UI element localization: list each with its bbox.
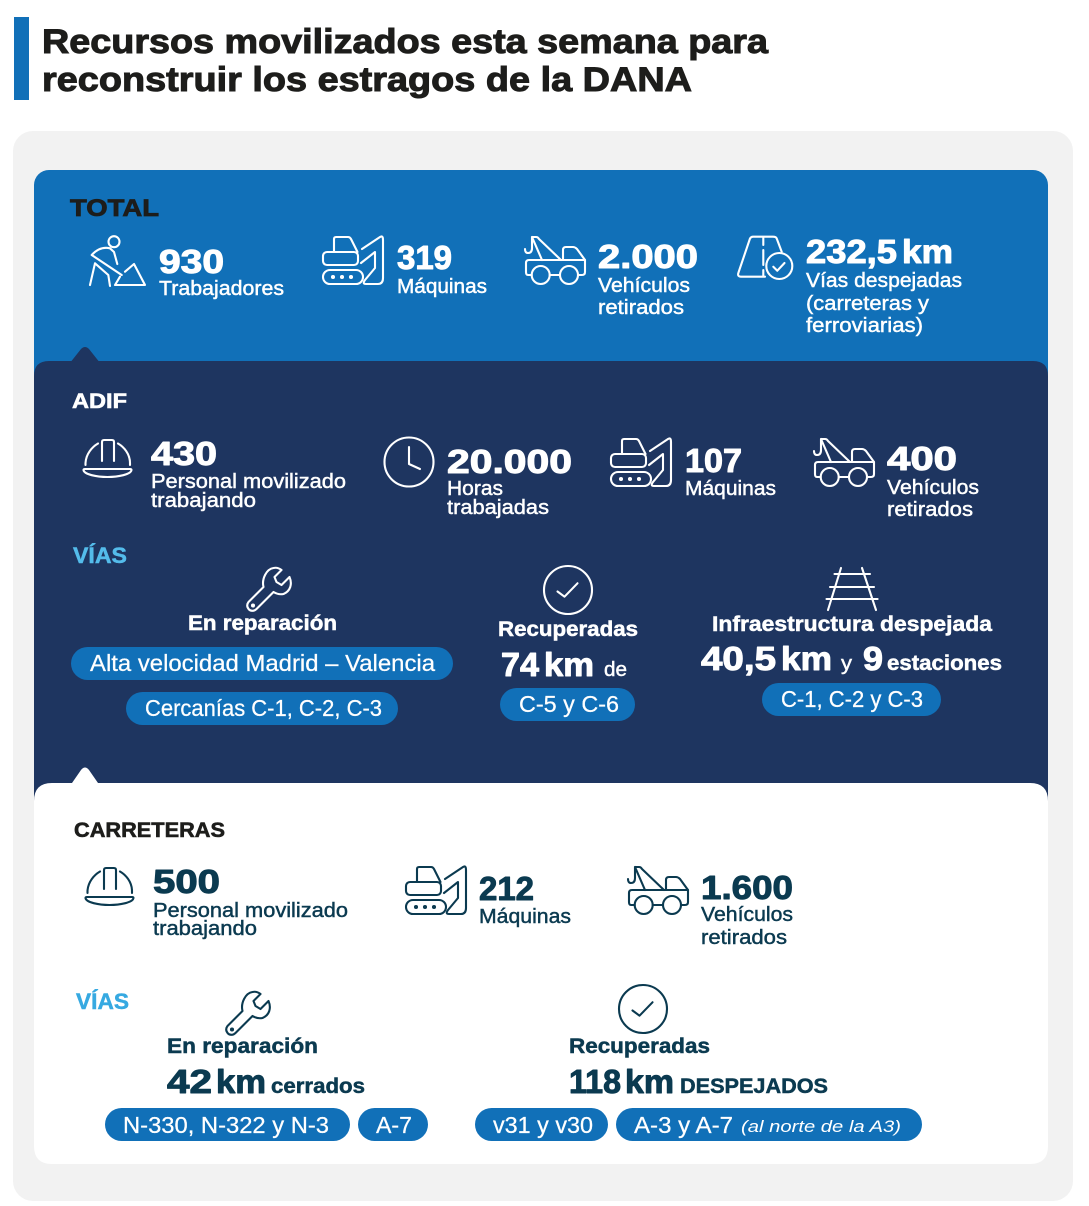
pill: alta velocidad bbox=[71, 647, 453, 680]
kilometres and stations bbox=[701, 640, 1002, 677]
kilometres and stations: km bbox=[781, 640, 832, 677]
kilometres: 74 bbox=[501, 646, 540, 683]
icon: tow truck bbox=[525, 237, 585, 284]
stat: máquinas bbox=[611, 438, 776, 500]
number: km bbox=[902, 233, 953, 270]
number bbox=[806, 233, 953, 270]
kilometres: cerrados bbox=[271, 1075, 365, 1098]
subheading: Recuperadas bbox=[569, 1035, 710, 1058]
subheading: En reparación bbox=[167, 1035, 318, 1058]
kilometres bbox=[167, 1063, 365, 1100]
panel: carreteras bbox=[34, 768, 1048, 1164]
subheading: En reparación bbox=[188, 612, 337, 635]
title bbox=[42, 23, 769, 99]
label: trabajando bbox=[151, 490, 256, 512]
stat: vías despejadas bbox=[738, 233, 962, 337]
pill: a-3 y a-7: (al norte de la A3) bbox=[741, 1118, 901, 1136]
title accent bar bbox=[14, 17, 29, 100]
icon: helmet bbox=[86, 868, 134, 905]
icon: excavator bbox=[323, 236, 383, 284]
kilometres: 118 bbox=[569, 1063, 621, 1100]
kilometres: 42 bbox=[167, 1063, 212, 1100]
heading: adif: ADIF bbox=[72, 390, 127, 413]
number: 930 bbox=[159, 243, 224, 280]
number: 430 bbox=[151, 435, 217, 472]
title: reconstruir los estragos de la DANA bbox=[42, 61, 692, 99]
pill: c-1, c-2 y c-3 bbox=[762, 683, 941, 716]
icon: wrench bbox=[226, 992, 270, 1035]
pill: a-3 y a-7: A-3 y A-7 bbox=[634, 1112, 733, 1138]
kilometres and stations: estaciones bbox=[887, 652, 1002, 675]
pill: a-3 y a-7 bbox=[616, 1108, 922, 1141]
icon: worker with shovel bbox=[90, 236, 145, 286]
number: 500 bbox=[153, 863, 220, 900]
block: recuperadas bbox=[475, 985, 922, 1141]
pill: v31 y v30: v31 y v30 bbox=[493, 1112, 593, 1138]
pill: n-330, n-322 y n-3 bbox=[105, 1108, 350, 1141]
kilometres bbox=[501, 646, 627, 683]
block: infraestructura despejada bbox=[701, 568, 1002, 716]
pill: n-330, n-322 y n-3: N-330, N-322 y N-3 bbox=[123, 1112, 329, 1138]
label bbox=[887, 477, 979, 521]
icon: excavator bbox=[406, 866, 466, 914]
label bbox=[806, 270, 962, 337]
pill: cercanías: Cercanías C-1, C-2, C-3 bbox=[145, 695, 382, 721]
label: Vehículos bbox=[887, 477, 979, 499]
heading: vías: VÍAS bbox=[76, 989, 129, 1014]
label: Máquinas bbox=[479, 906, 571, 928]
pill: a-7: A-7 bbox=[376, 1112, 412, 1138]
kilometres: de bbox=[604, 659, 627, 681]
stat: máquinas bbox=[323, 236, 487, 298]
number: 319 bbox=[397, 239, 452, 276]
label: retirados bbox=[887, 499, 973, 521]
stat: personal bbox=[84, 435, 346, 512]
title block bbox=[14, 17, 769, 100]
pill: c-5 y c-6 bbox=[500, 688, 635, 721]
label: Máquinas bbox=[685, 478, 776, 500]
icon: railway track bbox=[826, 568, 878, 610]
subheading: Infraestructura despejada bbox=[712, 613, 992, 636]
pill: c-5 y c-6: C-5 y C-6 bbox=[519, 691, 619, 717]
pill: c-1, c-2 y c-3: C-1, C-2 y C-3 bbox=[781, 686, 923, 712]
label bbox=[447, 478, 549, 519]
icon: tow truck bbox=[814, 439, 874, 486]
panel: total bbox=[34, 170, 1048, 390]
icon: tow truck bbox=[628, 867, 688, 914]
kilometres bbox=[569, 1063, 828, 1100]
block: recuperadas bbox=[498, 566, 638, 721]
number: 1.600 bbox=[701, 869, 793, 906]
label: trabajadas bbox=[447, 497, 549, 519]
label: Horas bbox=[447, 478, 503, 500]
heading: carreteras: CARRETERAS bbox=[74, 819, 225, 842]
stat: trabajadores bbox=[90, 236, 284, 300]
label: (carreteras y bbox=[806, 293, 929, 315]
label: Personal movilizado bbox=[151, 471, 346, 493]
number: 232,5 bbox=[806, 233, 897, 270]
icon: helmet bbox=[84, 440, 132, 477]
label: Vehículos bbox=[598, 275, 690, 297]
icon: wrench bbox=[247, 568, 291, 611]
icon: clock bbox=[384, 438, 434, 486]
label bbox=[153, 900, 348, 940]
number: 107 bbox=[685, 442, 742, 479]
pill: a-7 bbox=[358, 1108, 428, 1141]
icon: road with check bbox=[738, 237, 792, 279]
kilometres: km bbox=[625, 1063, 674, 1100]
label: Trabajadores bbox=[159, 278, 284, 300]
label bbox=[701, 904, 793, 949]
number: 20.000 bbox=[447, 443, 572, 480]
kilometres and stations: y bbox=[841, 653, 852, 675]
label bbox=[598, 275, 690, 319]
label: trabajando bbox=[153, 918, 257, 940]
pill: alta velocidad: Alta velocidad Madrid – Valencia bbox=[90, 650, 435, 676]
label: retirados bbox=[701, 927, 787, 949]
heading: total: TOTAL bbox=[70, 195, 159, 222]
kilometres and stations: 40,5 bbox=[701, 640, 776, 677]
label bbox=[151, 471, 346, 512]
block: en reparación bbox=[71, 568, 453, 725]
label: Vehículos bbox=[701, 904, 793, 926]
block: en reparación bbox=[105, 992, 428, 1141]
stat: vehículos bbox=[814, 439, 979, 521]
stat: personal bbox=[86, 863, 348, 940]
stat: máquinas bbox=[406, 866, 571, 928]
panel: adif bbox=[34, 347, 1048, 830]
label: retirados bbox=[598, 297, 684, 319]
number: 2.000 bbox=[598, 238, 698, 275]
label: ferroviarias) bbox=[806, 315, 923, 337]
label: Personal movilizado bbox=[153, 900, 348, 922]
kilometres and stations: 9 bbox=[863, 640, 883, 677]
icon: check circle bbox=[544, 566, 592, 614]
label: Vías despejadas bbox=[806, 270, 962, 292]
icon: excavator bbox=[611, 438, 671, 486]
subheading: Recuperadas bbox=[498, 618, 638, 641]
stat: vehículos bbox=[628, 867, 793, 949]
title: Recursos movilizados esta semana para bbox=[42, 23, 769, 61]
number: 400 bbox=[887, 440, 957, 477]
number: 212 bbox=[479, 870, 534, 907]
pill: v31 y v30 bbox=[475, 1108, 608, 1141]
kilometres: km bbox=[544, 646, 594, 683]
kilometres: km bbox=[216, 1063, 266, 1100]
kilometres: DESPEJADOS bbox=[680, 1075, 828, 1098]
icon: check circle bbox=[619, 985, 667, 1033]
label: Máquinas bbox=[397, 276, 487, 298]
stat: horas bbox=[384, 438, 572, 519]
stat: vehículos bbox=[525, 237, 698, 319]
heading: vías: VÍAS bbox=[73, 543, 127, 568]
